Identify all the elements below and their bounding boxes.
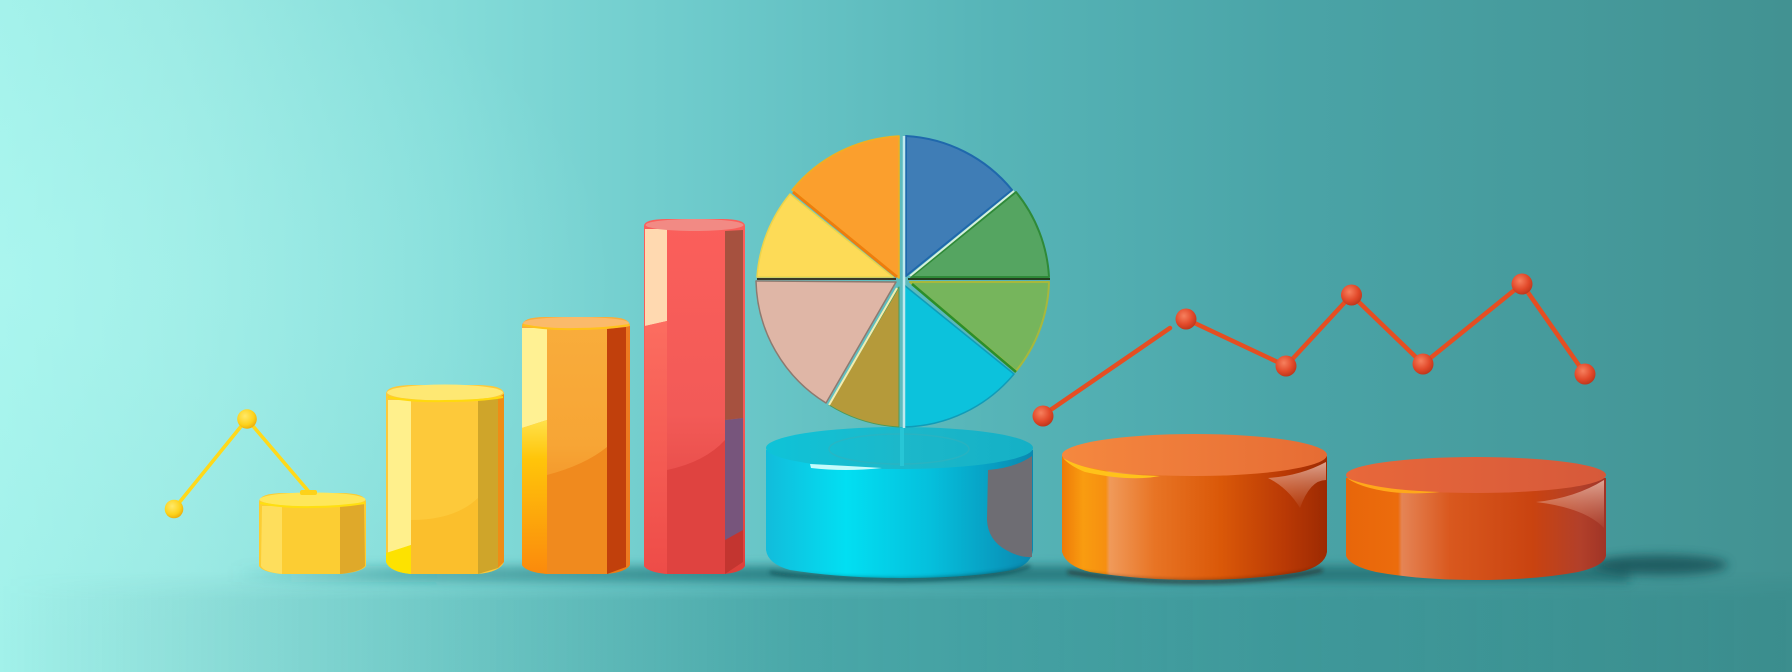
cylinder: large orange	[1062, 434, 1327, 582]
bar: orange	[522, 317, 630, 574]
cylinder: cyan	[766, 427, 1033, 580]
bar: red	[644, 219, 745, 574]
pie slice: olive	[829, 287, 899, 427]
pie slice: cyan	[904, 285, 1014, 427]
pie slice: yellow	[757, 194, 893, 277]
line chart: yellow	[165, 409, 310, 518]
pie slice: dark green	[911, 192, 1049, 277]
floor shadows	[230, 555, 1728, 582]
line chart: orange-red	[1032, 274, 1596, 426]
bar: small yellow	[259, 490, 366, 574]
pie slice: pink	[756, 281, 896, 403]
pie slice: light green	[910, 282, 1049, 371]
pie slice: orange	[792, 136, 899, 278]
pie chart	[756, 136, 1050, 428]
pie slice: blue	[906, 136, 1012, 276]
cylinder: second orange	[1346, 457, 1606, 580]
bar: medium yellow	[386, 384, 504, 574]
